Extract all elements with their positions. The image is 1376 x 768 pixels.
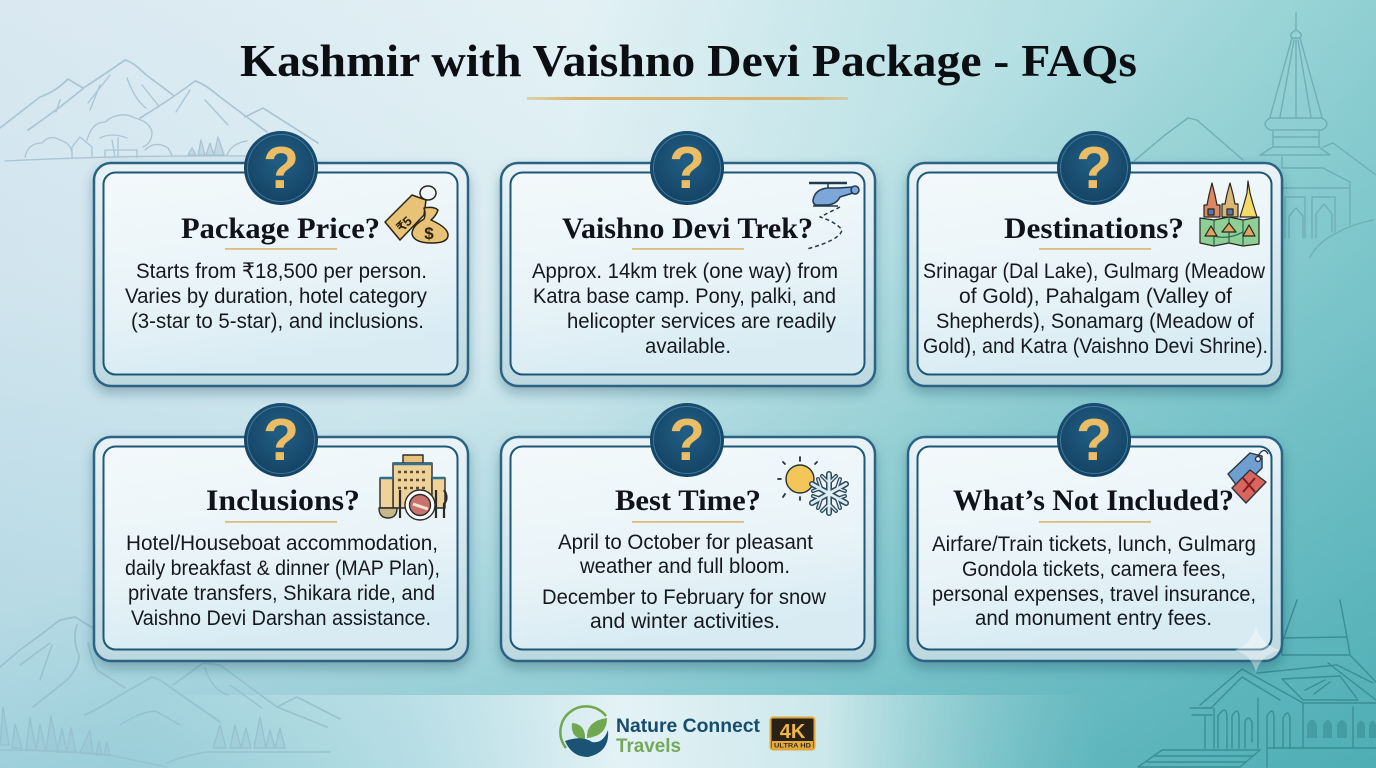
body text: daily breakfast & dinner (MAP Plan), — [125, 556, 440, 580]
body text — [932, 532, 1256, 630]
card frame — [501, 437, 875, 661]
icon: question badge — [650, 131, 724, 205]
title underline — [527, 97, 848, 100]
body text — [125, 259, 427, 333]
illustration: mountains and pines bottom left — [0, 617, 340, 767]
icon: leaf and wave — [560, 706, 608, 757]
panel: inclusions — [94, 403, 468, 661]
body text: Vaishno Devi Darshan assistance. — [131, 606, 431, 630]
body text: December to February for snow — [542, 585, 826, 609]
icon: price tag and money bag — [385, 186, 448, 243]
body text: Gondola tickets, camera fees, — [962, 557, 1226, 581]
card frame — [501, 163, 875, 386]
body text: Srinagar (Dal Lake), Gulmarg (Meadow — [923, 259, 1265, 283]
card frame — [908, 163, 1282, 386]
heading underline — [225, 521, 337, 523]
title: Kashmir with Vaishno Devi Package - FAQs — [240, 35, 1137, 86]
body text — [125, 531, 440, 630]
icon: question badge — [244, 403, 318, 477]
body text: weather and full bloom. — [579, 554, 790, 578]
brand tagline: Travels — [616, 735, 681, 757]
panel: vaishno devi trek — [501, 131, 875, 386]
body text: April to October for pleasant — [558, 530, 813, 554]
body text: Varies by duration, hotel category — [125, 284, 427, 308]
body text: Starts from ₹18,500 per person. — [136, 259, 427, 283]
illustration: mountains and village top left — [0, 60, 318, 161]
icon: question badge: ? — [263, 135, 299, 201]
heading: Vaishno Devi Trek? — [562, 212, 813, 245]
illustration: shrine bottom right — [1138, 600, 1376, 767]
panel: best time — [501, 403, 875, 661]
body text: Shepherds), Sonamarg (Meadow of — [936, 309, 1254, 333]
icon: question badge — [1057, 131, 1131, 205]
panel: destinations — [908, 131, 1282, 386]
body text: of Gold), Pahalgam (Valley of — [959, 284, 1232, 308]
illustration: shrine and mountain top right — [1133, 13, 1376, 257]
icon: crossed out tags — [1228, 450, 1268, 503]
icon: question badge: ? — [669, 407, 705, 473]
icon: hotel and meal — [379, 455, 446, 520]
icon: question badge: ? — [669, 135, 705, 201]
body text: available. — [645, 334, 731, 358]
icon: price tag and money bag: ₹5 — [393, 213, 415, 235]
icon: question badge: ? — [263, 407, 299, 473]
icon: question badge — [1057, 403, 1131, 477]
card frame — [94, 163, 468, 386]
footer band — [0, 695, 1376, 768]
body text: Airfare/Train tickets, lunch, Gulmarg — [932, 532, 1256, 556]
icon: helicopter with dashed trail — [807, 183, 859, 249]
heading underline — [632, 248, 744, 250]
icon: question badge — [244, 131, 318, 205]
body text: and winter activities. — [590, 609, 780, 633]
body text: and monument entry fees. — [975, 606, 1212, 630]
body text: Approx. 14km trek (one way) from — [532, 259, 838, 283]
body text: Hotel/Houseboat accommodation, — [126, 531, 438, 555]
body text: Katra base camp. Pony, palki, and — [533, 284, 836, 308]
logo: nature connect travels — [560, 706, 760, 757]
body text: Gold), and Katra (Vaishno Devi Shrine). — [923, 334, 1268, 358]
body text: helicopter services are readily — [567, 309, 836, 333]
badge: 4K — [770, 718, 814, 750]
icon: question badge: ? — [1076, 135, 1112, 201]
card frame — [908, 437, 1282, 661]
body text: personal expenses, travel insurance, — [932, 582, 1256, 606]
heading: Inclusions? — [206, 484, 360, 517]
heading underline — [1039, 521, 1151, 523]
heading underline — [632, 521, 744, 523]
heading: Package Price? — [181, 212, 380, 245]
badge: 4K: 4K — [780, 721, 806, 743]
heading: Best Time? — [615, 484, 761, 517]
body text — [532, 259, 838, 358]
body text — [542, 530, 826, 633]
sparkle — [1235, 624, 1280, 672]
icon: sun and snowflake — [778, 457, 846, 513]
badge: 4K: ULTRA HD — [774, 742, 811, 750]
body text: private transfers, Shikara ride, and — [128, 581, 435, 605]
icon: question badge — [650, 403, 724, 477]
brand name: Nature Connect — [616, 715, 760, 737]
body text: (3-star to 5-star), and inclusions. — [131, 309, 424, 333]
heading: Destinations? — [1004, 212, 1184, 245]
panel: what's not included — [908, 403, 1282, 661]
icon: temples and map — [1200, 181, 1259, 246]
icon: price tag and money bag: $ — [424, 224, 434, 243]
heading underline — [225, 248, 337, 250]
panel: package price — [94, 131, 468, 386]
body text — [923, 259, 1268, 358]
heading: What’s Not Included? — [953, 484, 1234, 517]
icon: question badge: ? — [1076, 407, 1112, 473]
heading underline — [1039, 248, 1151, 250]
card frame — [94, 437, 468, 661]
